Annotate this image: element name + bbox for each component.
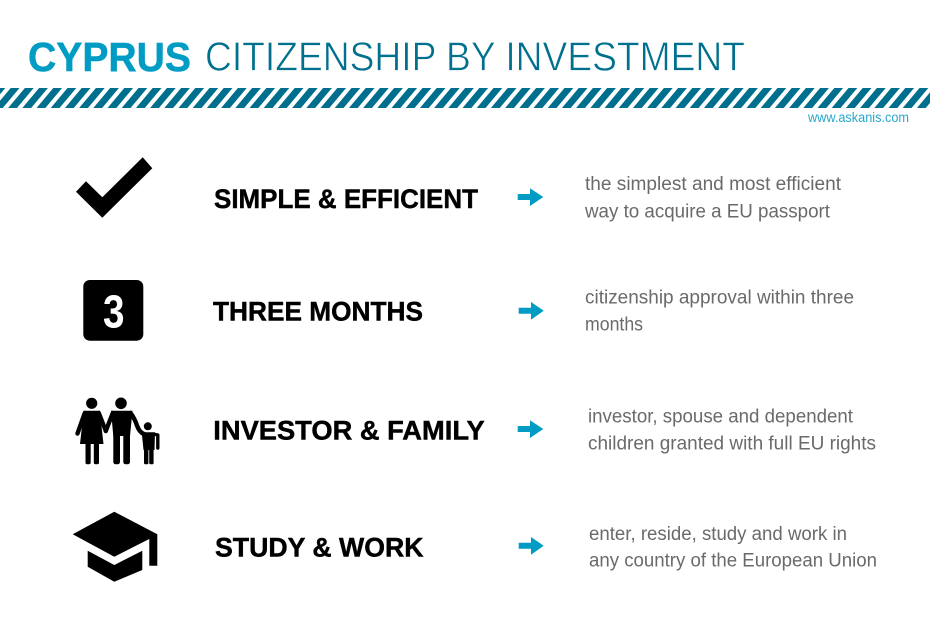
description [589,524,877,572]
description: citizenship approval within three [585,288,854,308]
description: months [585,315,643,336]
heading: three months: THREE MONTHS [213,296,423,326]
row: simple and efficient [76,157,842,222]
description [585,288,854,336]
icon: family [78,398,158,464]
title: CYPRUS [28,34,191,80]
row: three months [83,280,854,341]
heading: study and work: STUDY & WORK [215,532,424,562]
icon: number three [83,280,143,341]
heading: investor and family: INVESTOR & FAMILY [213,416,485,446]
striped banner [0,88,930,108]
arrow [519,537,544,555]
heading: simple and efficient: SIMPLE & EFFICIENT [214,184,478,214]
icon: graduation cap [73,512,157,582]
icon: number three: 3 [103,285,124,337]
description: way to acquire a EU passport [584,202,831,222]
row: investor and family [78,398,876,464]
title: CITIZENSHIP BY INVESTMENT [205,34,745,80]
description [584,174,842,222]
description [588,407,876,454]
description: children granted with full EU rights [588,434,876,454]
arrow [518,188,543,206]
arrow [518,420,543,438]
description: investor, spouse and dependent [588,407,854,428]
title [28,34,745,80]
description: any country of the European Union [589,551,877,572]
arrow [519,302,544,320]
icon: check mark [76,157,152,218]
row: study and work [73,512,877,582]
description: enter, reside, study and work in [589,524,847,545]
description: the simplest and most efficient [585,174,842,195]
website url: www.askanis.com [807,110,909,125]
